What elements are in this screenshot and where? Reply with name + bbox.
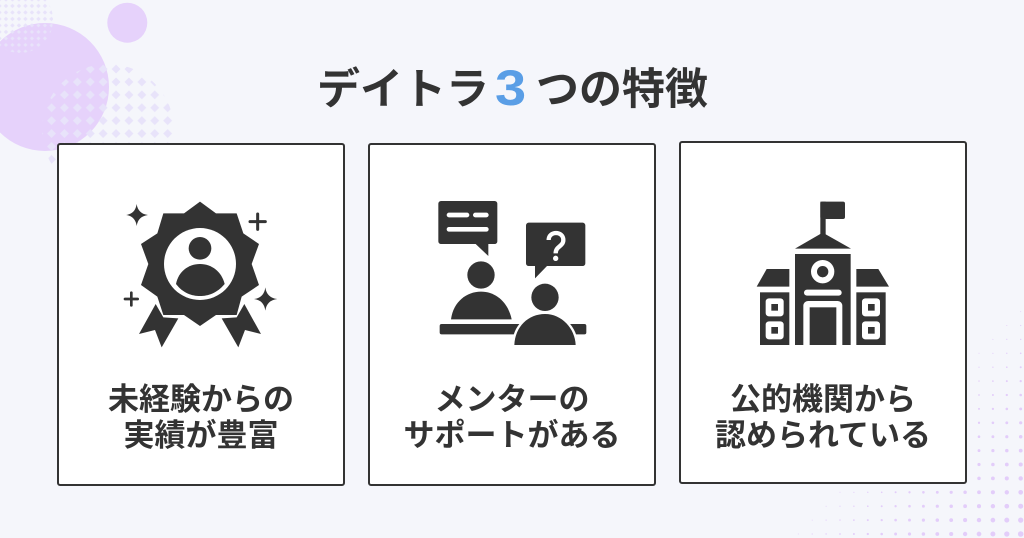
caption: public institution bbox=[715, 374, 931, 455]
caption: experience bbox=[108, 374, 294, 455]
panel: mentor bbox=[368, 143, 656, 486]
caption: experience: 実績が豊富 bbox=[124, 410, 278, 455]
caption: mentor: サポートがある bbox=[404, 410, 620, 455]
title: デイトラ bbox=[317, 55, 489, 117]
panel: experience bbox=[57, 143, 345, 486]
icon: mentor conversation bbox=[438, 201, 586, 345]
title: つの特徴 bbox=[536, 55, 708, 117]
caption: public institution: 公的機関から bbox=[730, 374, 916, 419]
caption: experience: 未経験からの bbox=[108, 374, 294, 419]
panel: public institution bbox=[679, 141, 967, 484]
title bbox=[317, 55, 708, 117]
title accent number: 3 bbox=[495, 60, 526, 116]
caption: public institution: 認められている bbox=[715, 410, 931, 455]
icon: award badge with person bbox=[125, 202, 277, 347]
caption: mentor bbox=[404, 374, 620, 455]
icon: school building bbox=[757, 202, 889, 345]
caption: mentor: メンターの bbox=[434, 374, 590, 419]
